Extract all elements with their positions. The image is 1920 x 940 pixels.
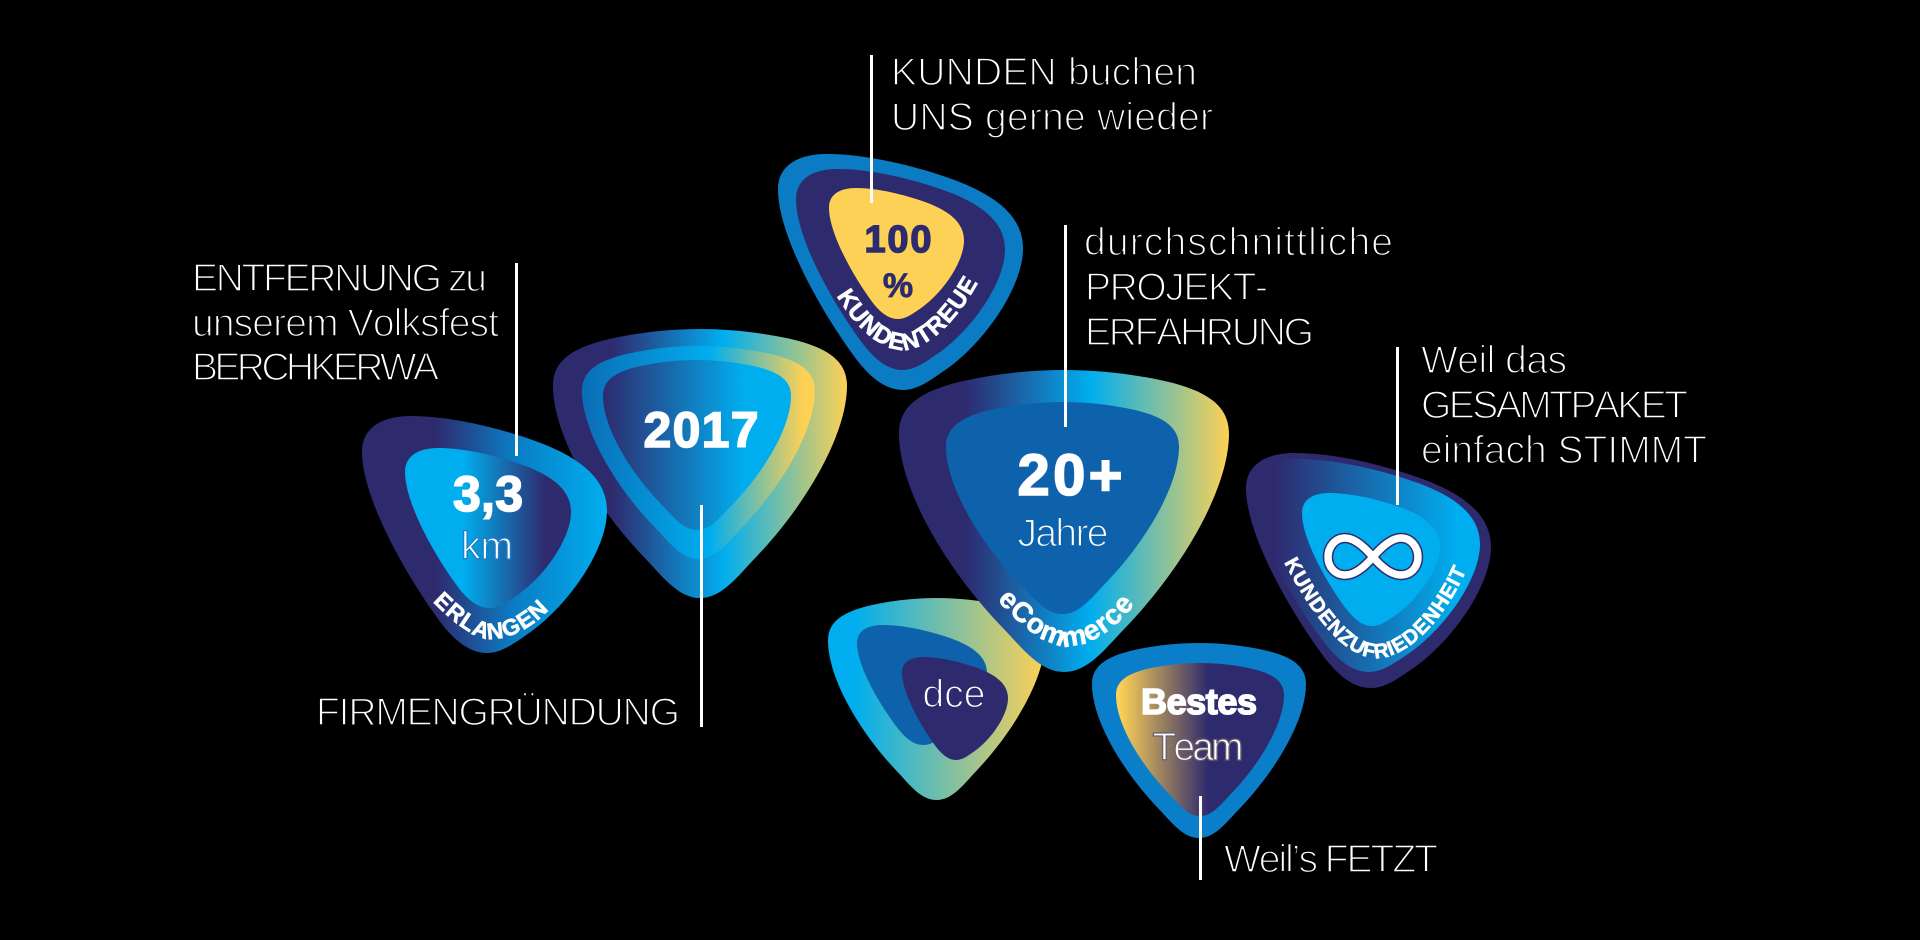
badge: Bestes Team [1092, 643, 1306, 838]
percent sign: % [883, 267, 913, 305]
callout: Gesamtpaket: einfach STIMMT [1421, 429, 1707, 472]
badge: eCommerce 20+ [898, 370, 1229, 672]
callout: Firmengründung [316, 505, 703, 734]
callout: Projekterfahrung: PROJEKT- [1085, 266, 1268, 309]
callout: Kunden buchen wieder: UNS gerne wieder [891, 96, 1213, 139]
Jahre unit: Jahre [1018, 512, 1108, 555]
Erlangen curved text: ERLANGEN [433, 591, 548, 640]
callout: Berchkerwa distance: unserem Volksfest [192, 302, 499, 345]
callout: Berchkerwa distance: BERCHKERWA [192, 346, 439, 389]
callout: Gesamtpaket: GESAMTPAKET [1421, 384, 1688, 427]
dce text: dce [922, 673, 986, 716]
badge: 2017 [553, 329, 847, 598]
callout: Projekterfahrung [1064, 221, 1393, 427]
20+ number: 20+ [1018, 443, 1122, 508]
badge: Erlangen 3,3 km [362, 416, 607, 653]
3,3 number: 3,3 [453, 466, 523, 522]
badge: Kundenzufriedenheit infinity [1246, 453, 1491, 688]
callout: Berchkerwa distance: ENTFERNUNG zu [192, 257, 487, 300]
callout: Gesamtpaket [1396, 339, 1707, 505]
Team text: Team [1152, 726, 1244, 769]
badge: Kundentreue 100 % [778, 154, 1023, 390]
Kundenzufriedenheit curved text: KUNDENZUFRIEDENHEIT [1284, 556, 1465, 659]
callout: Firmengründung: FIRMENGRÜNDUNG [316, 691, 680, 734]
callout: Projekterfahrung: ERFAHRUNG [1085, 311, 1314, 354]
callout: Weil's fetzt: Weil’s FETZT [1224, 838, 1438, 881]
callout: Kunden buchen wieder [870, 51, 1213, 203]
Kundentreue curved text: KUNDENTREUE [836, 275, 978, 351]
callout: Gesamtpaket: Weil das [1421, 339, 1567, 382]
2017 number: 2017 [644, 402, 758, 458]
icon: infinity [1328, 538, 1418, 575]
callout: Weil's fetzt [1199, 796, 1438, 881]
callout: Kunden buchen wieder: KUNDEN buchen [891, 51, 1197, 94]
callout: Projekterfahrung: durchschnittliche [1084, 221, 1393, 264]
Bestes text: Bestes [1141, 681, 1257, 722]
badge: dce [828, 598, 1045, 800]
eCommerce curved text: eCommerce [1000, 592, 1132, 648]
callout: Berchkerwa distance [192, 257, 518, 456]
100 percent: 100 [864, 219, 932, 261]
km unit: km [461, 525, 513, 568]
